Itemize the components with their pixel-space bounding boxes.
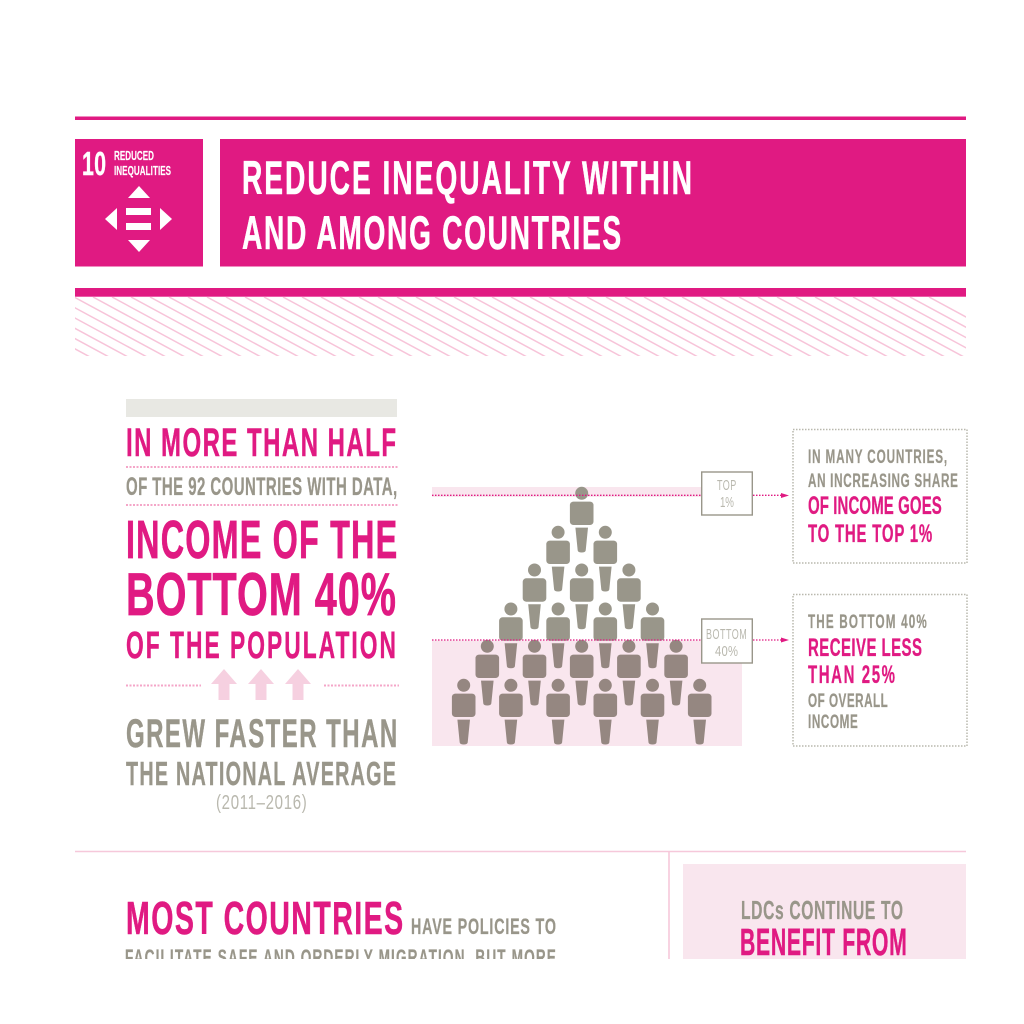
text: have policies to: HAVE POLICIES TO: [411, 914, 556, 939]
callout: bottom 40%: INCOME: [808, 711, 858, 733]
heading: benefit from: BENEFIT FROM: [740, 920, 907, 964]
callout: top 1%: IN MANY COUNTRIES,: [808, 446, 947, 468]
callout: top 1%: [793, 430, 967, 563]
label: bottom 40%: 40%: [715, 642, 738, 659]
section divider: [75, 852, 966, 959]
goal icon panel: [75, 139, 203, 266]
top 1% band: [432, 487, 701, 497]
callout: bottom 40%: THE BOTTOM 40%: [808, 611, 927, 633]
bottom crop mask: [0, 959, 1024, 1024]
text: LDCs continue to: LDCs CONTINUE TO: [741, 896, 903, 925]
text: grew faster than the national average: [126, 711, 397, 792]
text: years: (2011–2016): [216, 791, 307, 814]
callout: top 1%: OF INCOME GOES: [808, 492, 942, 520]
top rule: [75, 116, 966, 120]
text: of the 92 countries: OF THE 92 COUNTRIES WITH DATA,: [126, 473, 397, 501]
text: grew faster than the national average: GREW FASTER THAN: [126, 711, 397, 755]
top 1% marker line: [432, 493, 789, 498]
text: grew faster than the national average: THE NATIONAL AVERAGE: [126, 755, 396, 792]
panel: income growth statement: [126, 399, 399, 814]
goal name: INEQUALITIES: [114, 164, 171, 179]
callout: bottom 40%: OF OVERALL: [808, 690, 888, 712]
chart: population pyramid: [432, 472, 789, 746]
heading: income of the bottom 40%: OF THE POPULATION: [126, 624, 396, 666]
hatched band: [75, 297, 966, 356]
panel: migration policies: [125, 893, 556, 970]
label: bottom 40%: BOTTOM: [706, 626, 747, 643]
callout: bottom 40%: [793, 594, 967, 746]
infographic canvas: [75, 116, 968, 959]
panel: LDCs: [683, 864, 966, 964]
heading: income of the bottom 40%: [126, 511, 397, 666]
label: top 1%: 1%: [720, 494, 734, 511]
icon: inequality arrows and equals sign: [105, 186, 172, 252]
heading: in more than half: IN MORE THAN HALF: [126, 420, 396, 464]
label: bottom 40%: [702, 619, 752, 663]
icon: three up arrows: [211, 669, 311, 700]
label: top 1%: TOP: [717, 477, 736, 494]
heading: income of the bottom 40%: INCOME OF THE: [126, 511, 397, 570]
title text: [242, 153, 692, 260]
heading: most countries: MOST COUNTRIES: [126, 893, 403, 945]
thick rule: [75, 288, 966, 297]
text: facilitate migration: FACILITATE SAFE AND ORDERLY MIGRATION, BUT MORE: [125, 945, 556, 970]
callout: top 1%: AN INCREASING SHARE: [808, 470, 958, 492]
title banner: [220, 139, 966, 266]
label: top 1%: [702, 472, 752, 515]
title text: AND AMONG COUNTRIES: [242, 208, 621, 260]
goal number: 10: [82, 145, 106, 182]
heading: income of the bottom 40%: BOTTOM 40%: [126, 561, 396, 628]
goal name: [114, 149, 171, 179]
bottom 40% marker line: [432, 638, 789, 642]
title text: REDUCE INEQUALITY WITHIN: [242, 153, 692, 205]
bottom 40% band: [432, 640, 742, 746]
callout: top 1%: TO THE TOP 1%: [808, 520, 932, 548]
goal name: REDUCED: [114, 149, 154, 164]
callout: bottom 40%: RECEIVE LESS: [808, 634, 922, 662]
people pyramid: [452, 487, 712, 744]
callout: bottom 40%: THAN 25%: [808, 661, 895, 689]
